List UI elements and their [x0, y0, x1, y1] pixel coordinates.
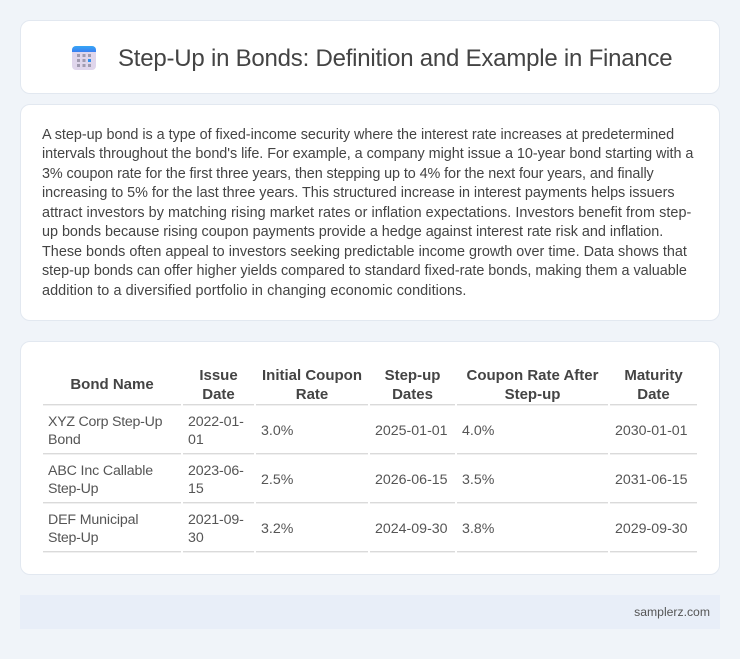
table row: XYZ Corp: 3.0%	[261, 423, 293, 439]
description text: These bonds often appeal to investors seeking predictable income growth over time. Data shows that	[42, 244, 687, 260]
footer bar	[20, 595, 720, 629]
table row: DEF Municipal	[48, 512, 688, 546]
table row: DEF Municipal: DEF Municipal	[48, 512, 138, 528]
description text: attract investors by matching rising market rates or inflation expectations. Investors benefit from step-	[42, 205, 691, 221]
table header: Issue	[199, 367, 238, 384]
table row: XYZ Corp: 01	[188, 432, 204, 448]
table row: XYZ Corp: Bond	[48, 432, 81, 448]
table header: Dates	[392, 386, 433, 403]
table row: DEF Municipal: 30	[188, 530, 204, 546]
description text: addition to a diversified portfolio in changing economic conditions.	[42, 283, 467, 299]
table header: Date	[202, 386, 235, 403]
table header: Maturity	[624, 367, 683, 384]
table row: ABC Inc: ABC Inc Callable	[48, 463, 153, 479]
table row: ABC Inc: 15	[188, 481, 204, 497]
panel: description	[20, 104, 720, 321]
table row: DEF Municipal: 3.8%	[462, 521, 494, 537]
table row: ABC Inc: 2026-06-15	[375, 472, 448, 488]
table header: Rate	[296, 386, 328, 403]
table row: XYZ Corp	[48, 414, 688, 448]
table row: DEF Municipal: 2029-09-30	[615, 521, 688, 537]
description text: increasing to 5% for the last three years. This structured increase in interest payments helps issuers	[42, 185, 675, 201]
header panel	[20, 20, 720, 94]
table row: DEF Municipal: 2021-09-	[188, 512, 244, 528]
table row: DEF Municipal: 3.2%	[261, 521, 293, 537]
description text: 3% coupon rate for the first three years, then stepping up to 4% for the next four years, and finally	[42, 166, 654, 182]
table row: ABC Inc: 2031-06-15	[615, 472, 688, 488]
table row: ABC Inc	[48, 463, 688, 497]
table row: ABC Inc: 3.5%	[462, 472, 494, 488]
table row: XYZ Corp: 2030-01-01	[615, 423, 688, 439]
table row: DEF Municipal: Step-Up	[48, 530, 98, 546]
footer source: samplerz.com	[634, 605, 710, 619]
title: Step-Up in Bonds: Definition and Example in Finance	[118, 45, 672, 72]
table header: Step-up	[385, 367, 440, 384]
table row: ABC Inc: 2.5%	[261, 472, 293, 488]
table row: XYZ Corp: 2022-01-	[188, 414, 244, 430]
description text: A step-up bond is a type of fixed-income security where the interest rate increases at predetermined	[42, 127, 674, 143]
table row: ABC Inc: 2023-06-	[188, 463, 244, 479]
table	[43, 367, 697, 553]
table header: Step-up	[505, 386, 560, 403]
panel: bond table	[20, 341, 720, 575]
table row: XYZ Corp: 2025-01-01	[375, 423, 448, 439]
description text: up bonds because rising coupon payments provide a hedge against interest rate risk and inflation.	[42, 224, 663, 240]
table header	[70, 367, 683, 403]
table row: DEF Municipal: 2024-09-30	[375, 521, 448, 537]
table row: ABC Inc: Step-Up	[48, 481, 98, 497]
description text	[42, 127, 694, 299]
table header: Bond Name	[70, 376, 154, 393]
table row: XYZ Corp: 4.0%	[462, 423, 494, 439]
description text: step-up bonds can offer higher yields compared to standard fixed-rate bonds, making them a valuable	[42, 263, 687, 279]
table header: Date	[637, 386, 670, 403]
description text: intervals throughout the bond's life. For example, a company might issue a 10-year bond starting with a	[42, 146, 693, 162]
table header: Initial Coupon	[262, 367, 362, 384]
table header: Coupon Rate After	[467, 367, 598, 384]
table row: XYZ Corp: XYZ Corp Step-Up	[48, 414, 162, 430]
icon: calendar	[72, 46, 96, 70]
